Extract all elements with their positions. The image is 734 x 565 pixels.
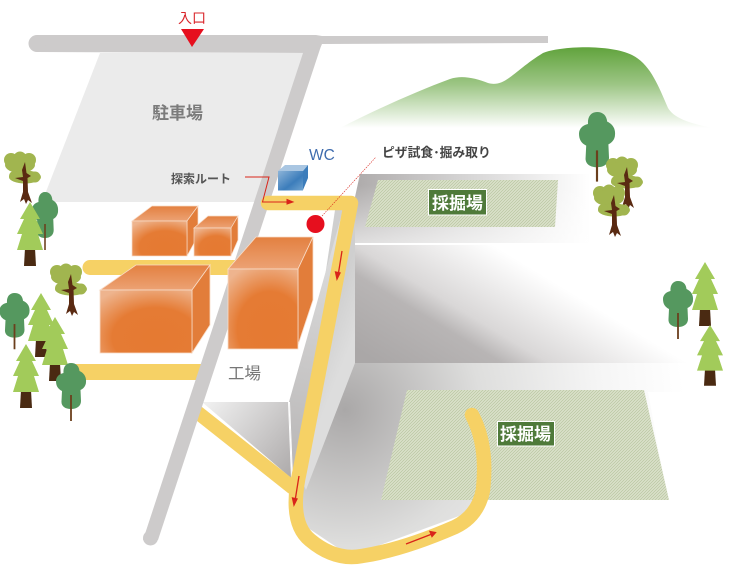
- main road: top horizontal: [37, 35, 548, 53]
- tree: olive middle left: [50, 264, 87, 316]
- parking label: 駐車場: [152, 103, 203, 123]
- WC building: [278, 165, 308, 190]
- tasting leader line: [322, 157, 376, 216]
- main road: diagonal: [143, 43, 322, 546]
- slope triangle below factory: [202, 402, 291, 478]
- route leader arrow: [245, 177, 293, 204]
- tree: conifer cluster front: [42, 317, 68, 381]
- tree: olive upper right: [606, 156, 643, 209]
- entrance marker: [181, 29, 204, 47]
- tree: round bottom left: [56, 363, 86, 421]
- divider line: [355, 243, 590, 245]
- route label: 探索ルート: [171, 171, 231, 186]
- yellow side roads: [75, 268, 293, 488]
- entrance label: 入口: [178, 10, 206, 26]
- tree: olive top left: [4, 152, 41, 204]
- tree: round far left: [0, 293, 30, 349]
- quarry pit: upper terrace: [355, 174, 592, 243]
- quarry zone: lower: [381, 390, 669, 500]
- tree: conifer cluster back: [28, 293, 54, 357]
- tree: conifer left: [17, 202, 43, 266]
- WC label: WC: [309, 147, 335, 164]
- exploration route: yellow road: [268, 203, 484, 557]
- building: large right: [228, 237, 313, 349]
- direction arrow: road upper: [336, 251, 342, 279]
- quarry label: lower: 採掘場: [500, 425, 551, 444]
- factory label: 工場: [228, 364, 261, 383]
- direction arrow: road lower: [292, 476, 299, 505]
- parking lot: [42, 53, 305, 202]
- tree: conifer bottom left: [13, 344, 39, 408]
- tree: olive lower right: [593, 184, 630, 237]
- quarry pit: middle slope: [355, 245, 700, 363]
- tree: round right: [663, 281, 693, 339]
- quarry zone: upper: [365, 180, 558, 227]
- direction arrow: bottom curve: [406, 532, 436, 544]
- building: small right: [194, 216, 238, 256]
- pit side slope beside the road: [296, 197, 355, 490]
- quarry label: upper: 採掘場: [432, 194, 483, 213]
- building: large left: [100, 265, 210, 353]
- quarry label: upper: [428, 190, 486, 215]
- tree: conifer right upper: [692, 262, 718, 326]
- tree: round upper right: [579, 112, 615, 182]
- tasting label: ピザ試食･掘み取り: [382, 145, 491, 160]
- tasting spot marker: [306, 215, 324, 233]
- road end cap: [28, 35, 46, 52]
- quarry label: lower: [498, 422, 554, 446]
- tree: conifer right lower: [697, 325, 723, 386]
- mountain: [340, 47, 712, 128]
- tree: round left: [32, 192, 58, 250]
- quarry pit: lower floor: [296, 363, 700, 556]
- building: small left: [132, 206, 198, 256]
- slope below factory terrace: [289, 210, 354, 480]
